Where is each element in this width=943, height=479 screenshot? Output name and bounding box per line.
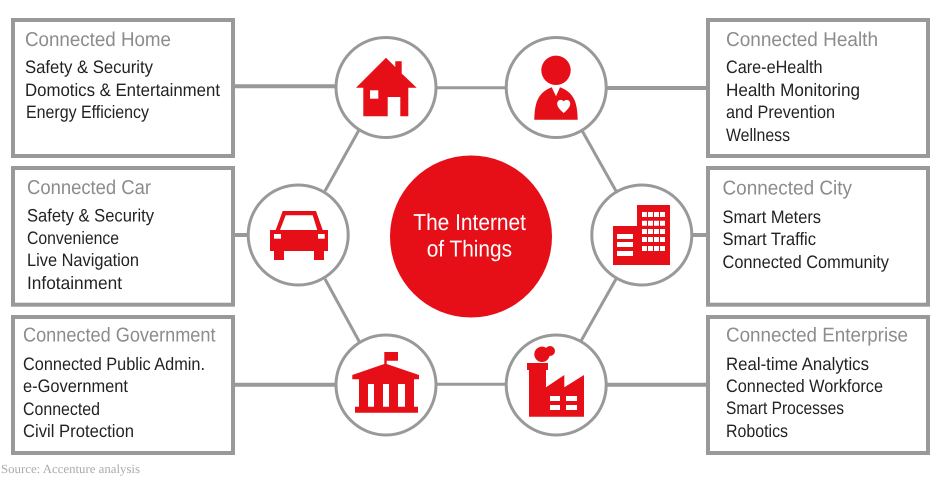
icon: house bbox=[336, 38, 436, 138]
list: Connected Car items: Infotainment bbox=[27, 273, 122, 293]
panel: Connected Health bbox=[708, 20, 928, 156]
panel: Connected Car bbox=[13, 168, 233, 305]
list: Connected Car items bbox=[27, 206, 154, 293]
list: Connected City items: Smart Traffic bbox=[722, 229, 816, 249]
list: Connected Government items: Connected bbox=[23, 399, 100, 419]
central hub: The Internet of Things bbox=[390, 156, 552, 318]
list: Connected Government items: e-Government bbox=[23, 376, 128, 396]
icon: city buildings bbox=[592, 185, 692, 285]
panel: Connected Enterprise bbox=[708, 317, 928, 453]
heading: Connected Car: Connected Car bbox=[27, 177, 151, 199]
connector lines bbox=[235, 86, 706, 385]
list: Connected Government items: Connected Public Admin. bbox=[23, 354, 205, 374]
panel: Connected Home bbox=[13, 20, 233, 156]
list: Connected Car items: Live Navigation bbox=[27, 250, 139, 270]
list: Connected Home items bbox=[25, 57, 220, 122]
icon: factory bbox=[506, 335, 606, 435]
icon: person with heart bbox=[506, 38, 606, 138]
heading: Connected City: Connected City bbox=[722, 178, 852, 200]
heading: Connected Home: Connected Home bbox=[25, 29, 171, 51]
heading: Connected Government: Connected Government bbox=[23, 325, 216, 347]
list: Connected Car items: Convenience bbox=[27, 228, 119, 248]
list: Connected Enterprise items: Connected Workforce bbox=[726, 376, 883, 396]
central hub: The Internet of Things: of Things bbox=[427, 236, 512, 262]
list: Connected City items: Smart Meters bbox=[722, 207, 821, 227]
list: Connected Home items: Energy Efficiency bbox=[26, 102, 149, 122]
list: Connected Government items bbox=[23, 354, 205, 441]
list: Connected Health items: Wellness bbox=[726, 125, 790, 145]
list: Connected Government items: Civil Protection bbox=[23, 421, 134, 441]
heading: Connected Enterprise: Connected Enterprise bbox=[726, 325, 908, 347]
heading: Connected Health: Connected Health bbox=[726, 29, 878, 51]
list: Connected Enterprise items: Robotics bbox=[726, 421, 788, 441]
list: Connected Enterprise items: Real-time Analytics bbox=[726, 354, 869, 374]
list: Connected City items bbox=[722, 207, 889, 272]
list: Connected Enterprise items: Smart Processes bbox=[726, 398, 844, 418]
list: Connected Car items: Safety & Security bbox=[27, 206, 154, 226]
panel: Connected City bbox=[708, 168, 928, 305]
list: Connected Home items: Safety & Security bbox=[25, 57, 153, 77]
central hub: The Internet of Things: The Internet bbox=[413, 209, 527, 235]
panel: Connected Government bbox=[13, 317, 233, 453]
list: Connected Home items: Domotics & Entertainment bbox=[25, 80, 220, 100]
list: Connected City items: Connected Community bbox=[722, 252, 889, 272]
icon: government building bbox=[336, 335, 436, 435]
list: Connected Health items: and Prevention bbox=[726, 102, 835, 122]
list: Connected Enterprise items bbox=[726, 354, 883, 441]
icon: car bbox=[248, 185, 348, 285]
list: Connected Health items: Health Monitoring bbox=[726, 80, 860, 100]
list: Connected Health items: Care-eHealth bbox=[726, 57, 822, 77]
source note: Source: Accenture analysis bbox=[1, 462, 140, 476]
list: Connected Health items bbox=[726, 57, 860, 145]
